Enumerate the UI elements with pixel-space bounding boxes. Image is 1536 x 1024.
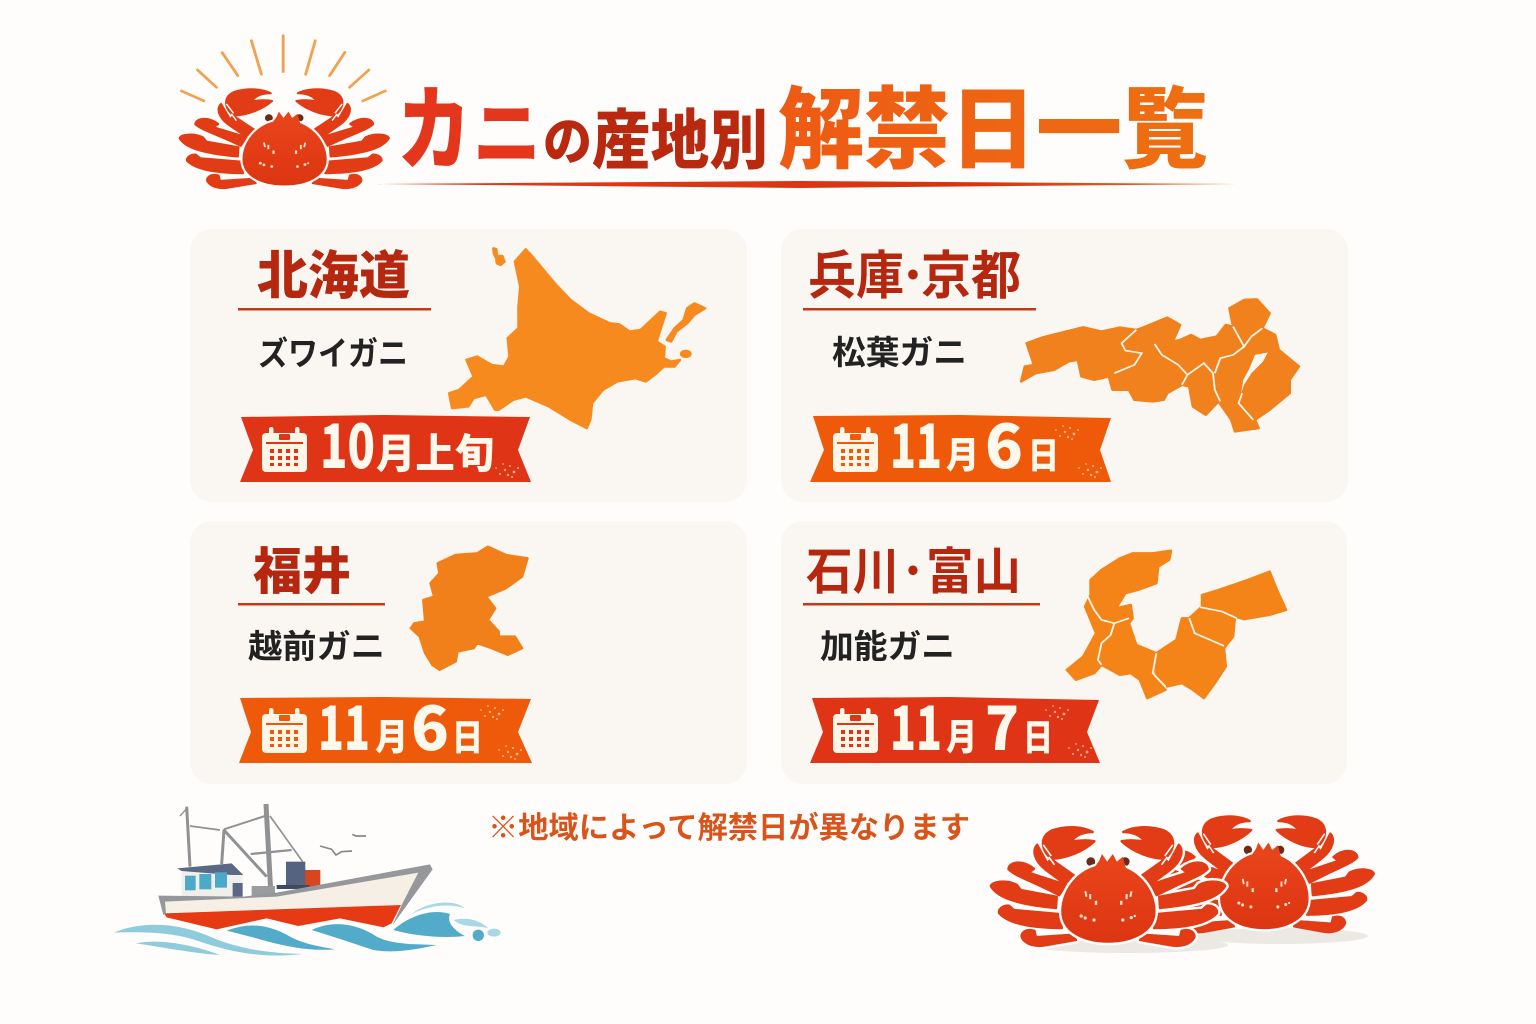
map: 兵庫・京都 (1021, 299, 1299, 431)
heading rule (803, 308, 1036, 310)
footnote: ※地域によって解禁日が異なります (488, 803, 970, 847)
heading: 石川・富山 (806, 532, 1021, 604)
date text: 月 (946, 425, 979, 479)
ribbon speckle (1045, 705, 1092, 758)
panel: 福井 (190, 521, 747, 784)
date text (318, 681, 483, 768)
date text (320, 399, 494, 486)
crab: right (1154, 816, 1374, 932)
date text: 6 (411, 681, 449, 768)
icon: calendar (262, 708, 307, 753)
panel: 兵庫・京都 (781, 229, 1348, 502)
title: 解禁日一覧: 解禁日一覧 (778, 58, 1208, 187)
date text: 月 (375, 707, 408, 761)
date text (890, 681, 1053, 768)
date text: 11 (890, 681, 942, 768)
icon: calendar (262, 427, 307, 472)
windows (185, 872, 227, 890)
cargo (305, 870, 320, 887)
crab name: 加能ガニ (820, 620, 955, 668)
heading rule (803, 603, 1040, 606)
icon: title crab with sun rays (180, 36, 389, 188)
heading: 北海道: 北海道 (257, 234, 410, 309)
date text: 月上旬 (376, 420, 494, 480)
heading: 兵庫・京都 (808, 234, 1021, 309)
date text: 7 (985, 681, 1019, 768)
date ribbon (810, 399, 1111, 486)
heading: 兵庫・京都: 兵庫 (808, 234, 904, 309)
date text: 日 (1023, 709, 1053, 761)
title: カ: カ (397, 56, 471, 189)
illustration: two crabs (991, 816, 1374, 953)
panel: 石川・富山 (781, 521, 1347, 784)
date text: 日 (452, 709, 483, 761)
date text: 11 (318, 681, 370, 768)
waves (114, 925, 303, 956)
title: 産地別: 産地別 (592, 88, 768, 182)
heading rule (238, 308, 431, 310)
title underline (375, 181, 1238, 188)
panel: 北海道 (190, 229, 747, 502)
icon: calendar (833, 708, 878, 753)
ribbon speckle (1055, 425, 1102, 478)
cabin (182, 869, 233, 897)
date text (890, 399, 1059, 486)
date text: 月 (946, 707, 977, 761)
map: 石川・富山 (1067, 551, 1286, 698)
masts and rigging (180, 804, 303, 890)
heading: 兵庫・京都: · (898, 234, 928, 309)
icon: calendar (833, 427, 878, 472)
hull (165, 873, 418, 913)
map: 福井 (411, 547, 527, 670)
crab shadows (1028, 928, 1368, 953)
ribbon speckle (480, 705, 522, 760)
gulls (320, 834, 366, 855)
heading rule (238, 603, 385, 606)
crab name: ズワイガニ (258, 327, 408, 375)
date ribbon (240, 399, 531, 486)
date ribbon (239, 681, 532, 768)
title: の: の (543, 100, 592, 175)
crab name: 越前ガニ (248, 620, 385, 668)
date ribbon (810, 681, 1100, 768)
ribbon speckle (495, 463, 519, 478)
heading: 石川・富山: 石川 (806, 532, 899, 604)
crab (180, 89, 389, 188)
date text: 11 (890, 399, 942, 486)
heading: 兵庫・京都: 京都 (921, 234, 1021, 309)
heading: 石川・富山: · (898, 532, 928, 604)
heading: 石川・富山: 富山 (926, 532, 1021, 604)
illustration: fishing boat and waves (114, 804, 501, 956)
date text: 6 (985, 399, 1023, 486)
date text: 日 (1028, 427, 1059, 479)
crab name: 松葉ガニ (832, 326, 967, 374)
title (397, 56, 1208, 189)
crab: left (991, 827, 1225, 946)
date text: 10 (320, 399, 375, 486)
crab: left white halo (991, 827, 1225, 946)
title: ニ: ニ (473, 73, 541, 183)
sun rays (181, 36, 385, 101)
map: 北海道 (449, 248, 705, 428)
heading: 福井: 福井 (253, 532, 351, 604)
